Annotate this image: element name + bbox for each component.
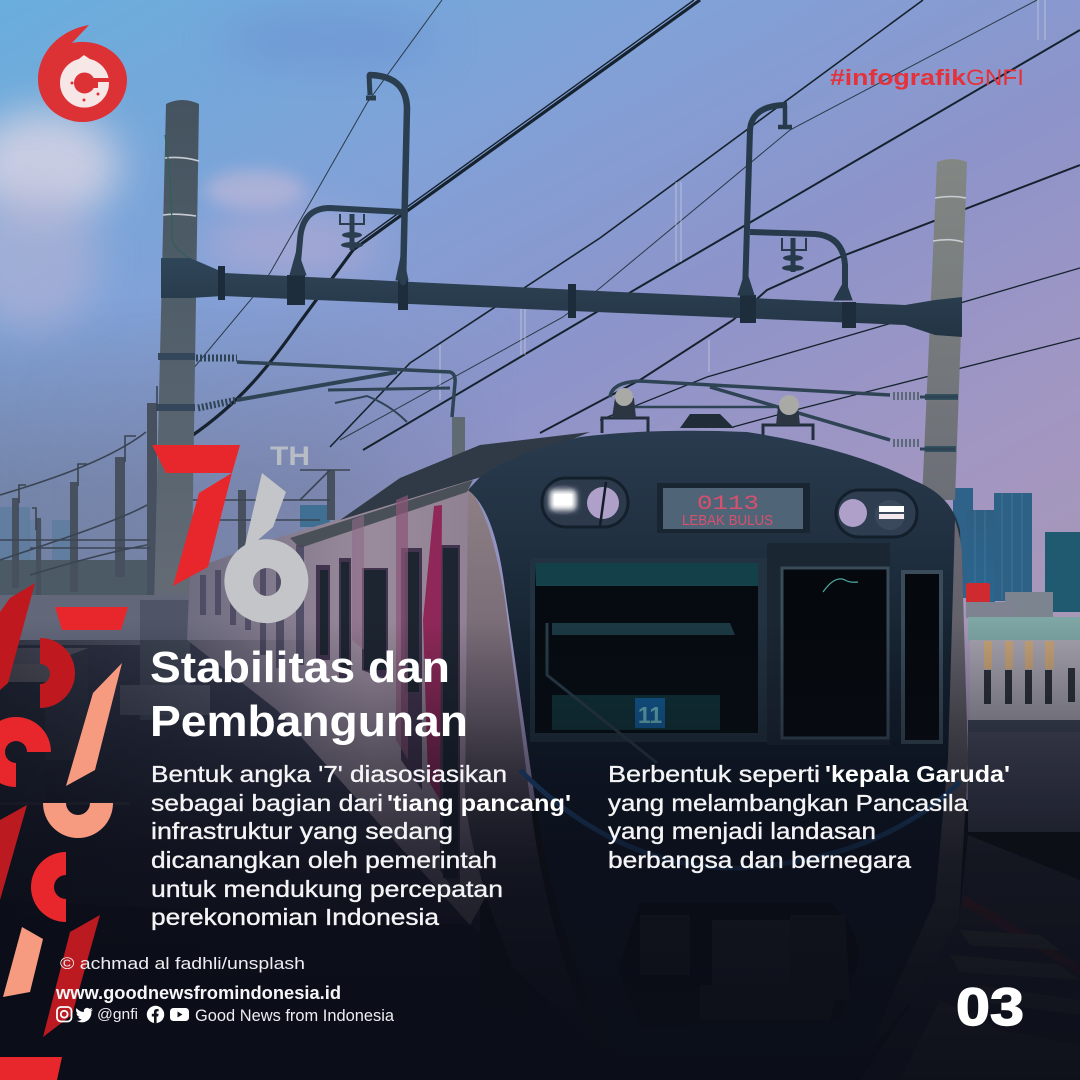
text block: tiang pancang: sebagai bagian dari: [151, 790, 383, 816]
heading: Stabilitas dan: [150, 643, 450, 692]
page number: 03: [956, 978, 1024, 1037]
right lamp housing: [836, 490, 917, 537]
icon: twitter: [76, 1008, 93, 1022]
trackbed lower right: [860, 835, 1080, 1080]
brand name: Good News from Indonesia: [195, 1006, 395, 1025]
right side window: [903, 572, 941, 742]
text block: kepala Garuda: Berbentuk seperti: [608, 761, 820, 787]
social handle: @gnfi: [97, 1006, 138, 1023]
heading: [150, 643, 468, 746]
dark overlay gradients: [0, 620, 1080, 1080]
text block: tiang pancang: untuk mendukung percepatan: [151, 876, 503, 902]
icon: instagram: [57, 1007, 72, 1022]
text block: kepala Garuda: 'kepala Garuda': [825, 761, 1010, 787]
photo credit: © achmad al fadhli/unsplash: [60, 954, 305, 973]
heading: Pembangunan: [150, 697, 468, 746]
right concrete pole: [922, 159, 967, 500]
website url: www.goodnewsfromindonesia.id: [55, 982, 341, 1003]
decorative shapes left edge: [0, 583, 128, 1080]
text block: tiang pancang: perekonomian Indonesia: [151, 904, 439, 930]
train front flank: [465, 488, 600, 1060]
destination display: 0113: [697, 493, 759, 516]
destination display: LEBAK BULUS: [682, 512, 773, 529]
background photo: distant buildings left: [0, 505, 330, 600]
logo: GNFI: [38, 25, 127, 122]
text block: kepala Garuda: yang melambangkan Pancasila: [608, 790, 968, 816]
icon: youtube: [170, 1008, 189, 1021]
text block: kepala Garuda: [608, 761, 1010, 873]
hashtag: GNFI: [966, 65, 1024, 90]
numeral 6: [224, 473, 308, 623]
pantograph bases on train roof: [602, 388, 813, 440]
hashtag: [830, 65, 1024, 90]
small pole behind train: [452, 417, 465, 467]
TH: TH: [270, 441, 310, 471]
right cantilever arms and insulator: [738, 105, 852, 300]
cab door and window: [767, 543, 890, 745]
overhead wires: [190, 0, 1080, 450]
background photo: distant catenary poles: [0, 386, 350, 603]
train side carriages: [187, 432, 590, 925]
numeral 7: [152, 445, 240, 586]
background photo: sky: [0, 0, 1080, 800]
lower steady arms: [196, 358, 958, 449]
left windscreen: [530, 558, 768, 763]
blue swoosh: [520, 770, 960, 868]
background photo: distant towers right: [953, 488, 1080, 618]
decorative 76 TH anniversary mark: [152, 441, 310, 623]
destination display: [657, 483, 810, 533]
left cantilever arms and insulator: [290, 75, 408, 282]
text block: tiang pancang: [151, 761, 571, 930]
hanger droppers on wires: [440, 0, 1045, 400]
left windscreen: 11: [638, 702, 662, 728]
icon: facebook: [147, 1006, 164, 1023]
lower coupler recess: [618, 903, 859, 1027]
left concrete pole: [152, 100, 199, 690]
text block: tiang pancang: Bentuk angka '7' diasosiasikan: [151, 761, 507, 787]
train front body: [468, 431, 968, 1060]
background photo: station building right: [968, 617, 1080, 832]
text block: kepala Garuda: yang menjadi landasan: [608, 818, 876, 844]
text block: tiang pancang: 'tiang pancang': [387, 790, 571, 816]
text block: tiang pancang: dicanangkan oleh pemerintah: [151, 847, 497, 873]
platform floor: [0, 595, 480, 1080]
left lamp housing: [542, 478, 628, 527]
text block: kepala Garuda: berbangsa dan bernegara: [608, 847, 911, 873]
text block: tiang pancang: infrastruktur yang sedang: [151, 818, 453, 844]
gantry crossbar: [161, 258, 962, 337]
hashtag: #infografik: [830, 65, 967, 90]
